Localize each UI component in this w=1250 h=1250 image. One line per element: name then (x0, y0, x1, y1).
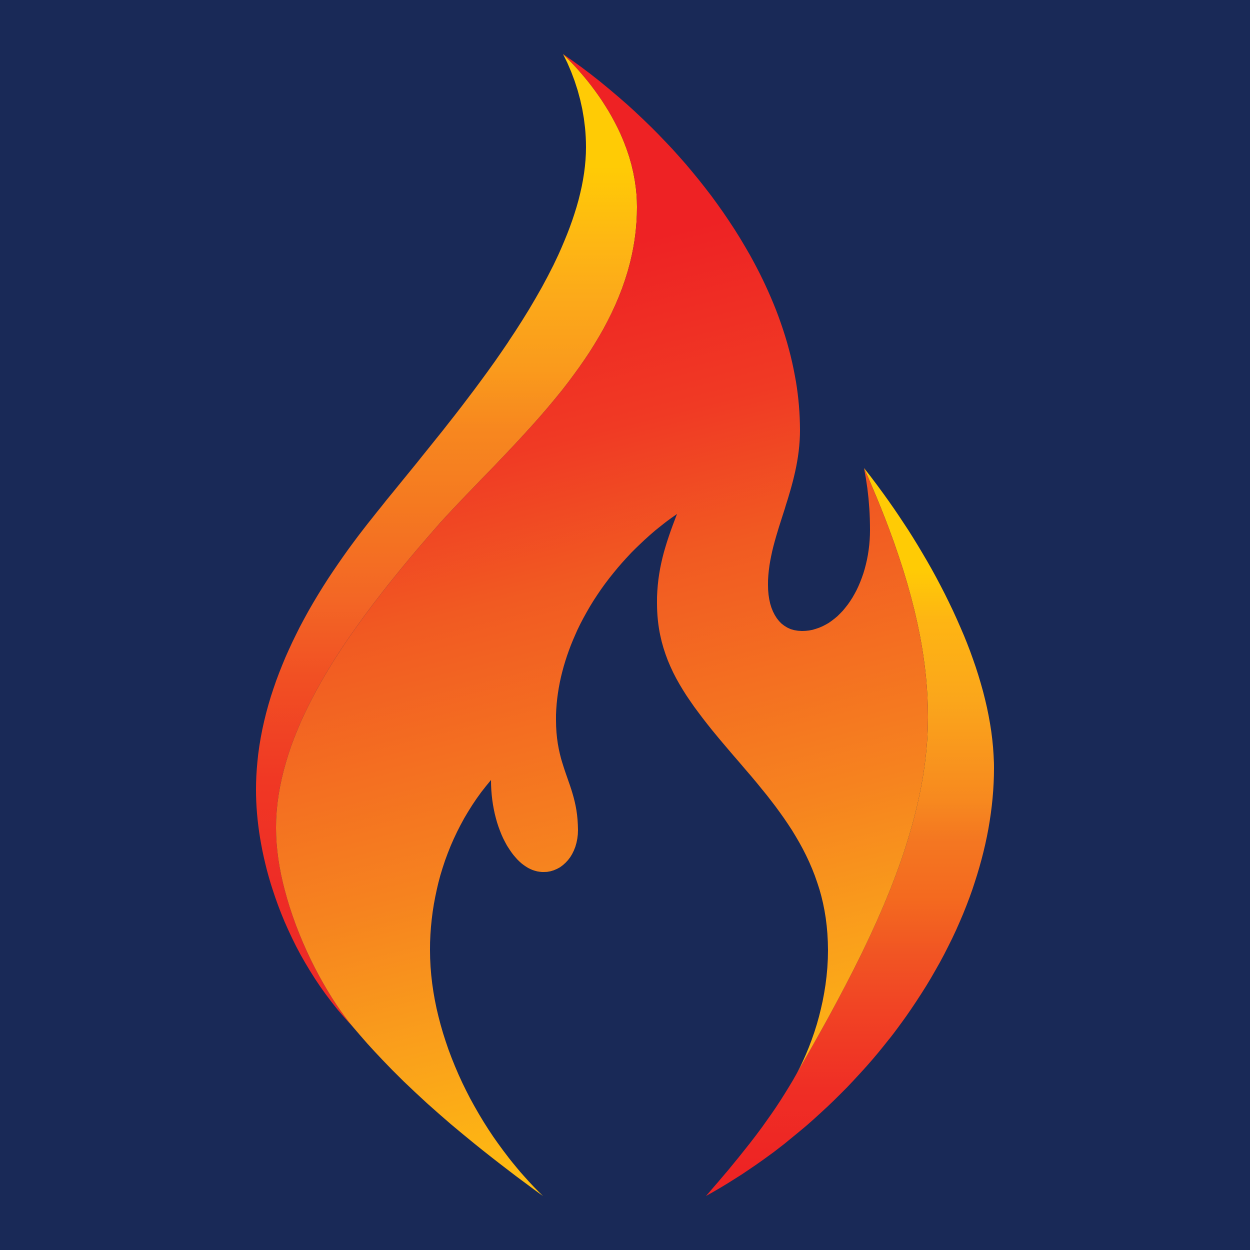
right outer flame tongue (706, 468, 994, 1196)
main flame body (276, 54, 928, 1196)
flame (256, 54, 994, 1196)
left outer flame tongue (256, 54, 637, 1027)
